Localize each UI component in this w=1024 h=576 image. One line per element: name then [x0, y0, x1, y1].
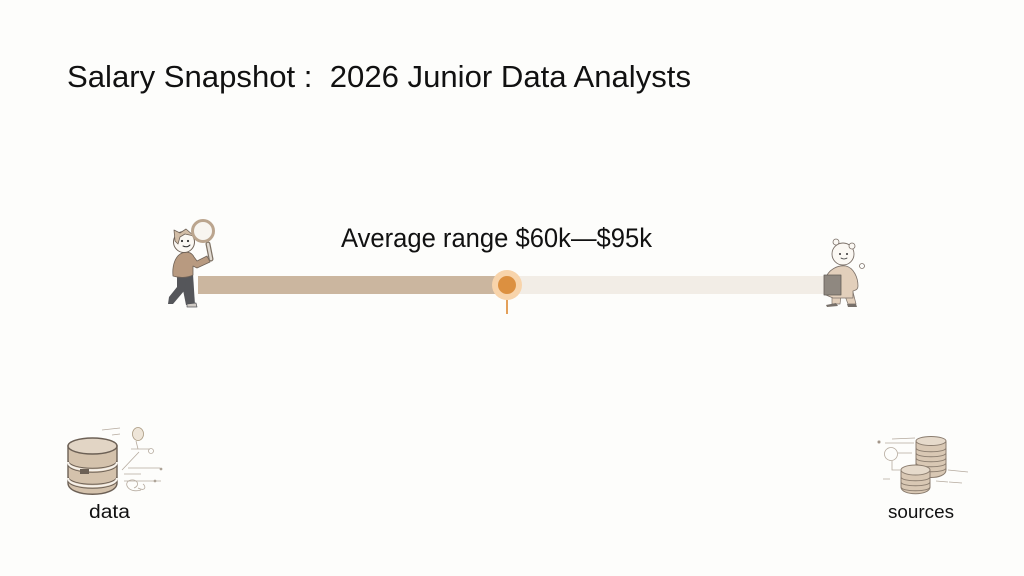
- data doodles: [102, 428, 162, 491]
- sources label: sources: [888, 502, 954, 522]
- sources doodles: [878, 438, 968, 483]
- salary range bar: [198, 270, 832, 314]
- icon: person holding folder: [824, 239, 864, 307]
- range label: Average range $60k—$95k: [341, 223, 652, 253]
- icon: analyst with magnifying glass: [168, 220, 214, 307]
- bar: filled range: [198, 276, 507, 294]
- large coin stack: [916, 436, 946, 478]
- icon: data database: [68, 428, 162, 494]
- data label: data: [89, 502, 130, 523]
- title: Salary Snapshot : 2026 Junior Data Analysts: [67, 59, 691, 94]
- bar: remaining track: [507, 276, 832, 294]
- marker: midpoint pin: [492, 270, 522, 314]
- small coin stack: [901, 465, 930, 494]
- icon: sources database stacks: [878, 436, 968, 494]
